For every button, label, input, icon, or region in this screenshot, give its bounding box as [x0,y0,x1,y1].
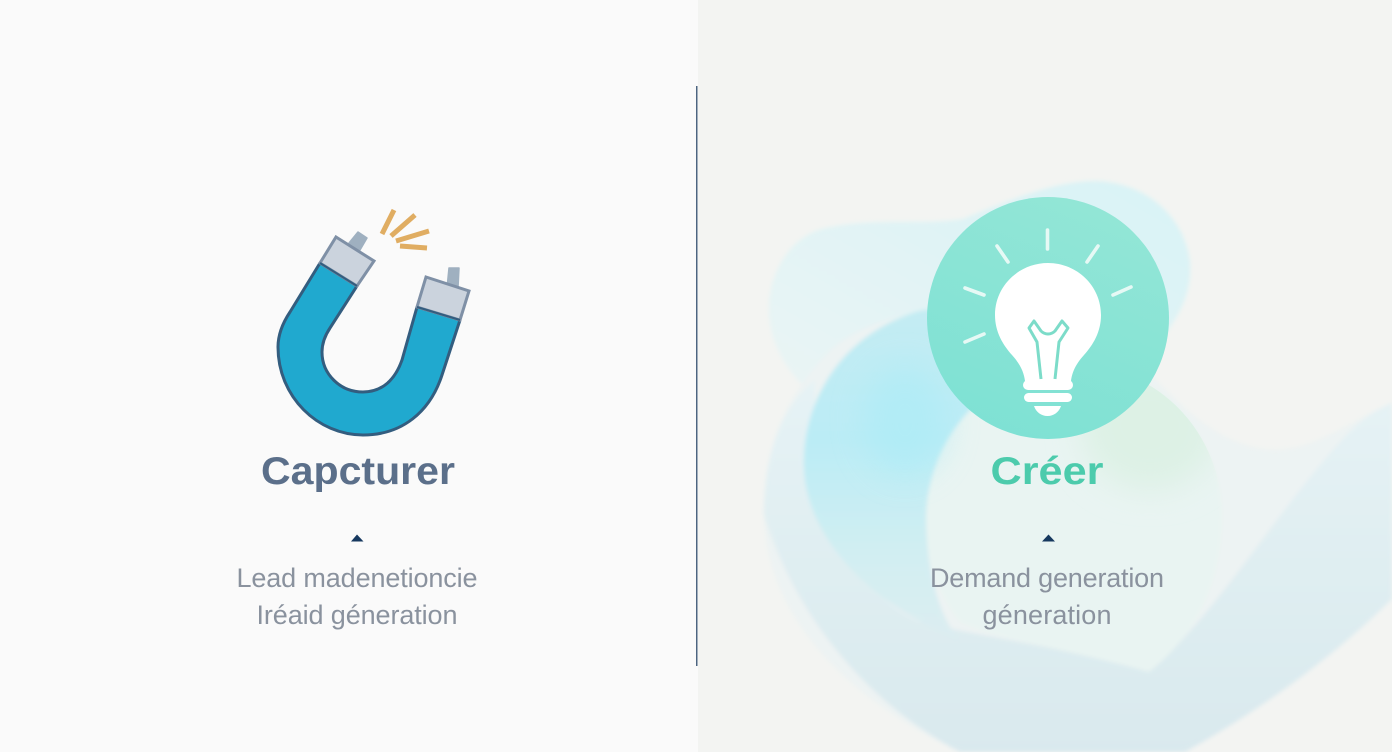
marker: right triangle [1042,534,1055,542]
text: left description [236,563,478,630]
heading: Capturer: Capcturer [261,450,455,493]
magnet left nub [349,232,367,250]
panel: left background [0,0,697,752]
text: left description: Lead madenetioncie [236,563,478,593]
bulb rays [965,230,1131,342]
icon: magnet [278,210,469,435]
magnet body [278,263,460,435]
magnet body edge lines [320,263,460,320]
bulb base [1023,380,1073,416]
divider line [696,86,698,666]
panel: right background with flowing shapes [759,176,1392,752]
magnet right cap [417,277,469,320]
marker: left triangle [351,534,364,542]
magnet right nub [447,268,459,288]
text: right description: Demand generation [930,563,1164,593]
heading: Créer: Créer [990,450,1104,493]
bulb filament [1029,321,1068,379]
text: right description [930,563,1164,630]
bulb glass [995,263,1101,381]
magnet left cap [320,237,374,286]
text: left description: Iréaid géneration [256,600,458,630]
bulb badge circle [927,197,1169,439]
icon: sparks [382,210,429,248]
icon: light bulb in circle [927,197,1169,439]
text: right description: géneration [982,600,1112,630]
